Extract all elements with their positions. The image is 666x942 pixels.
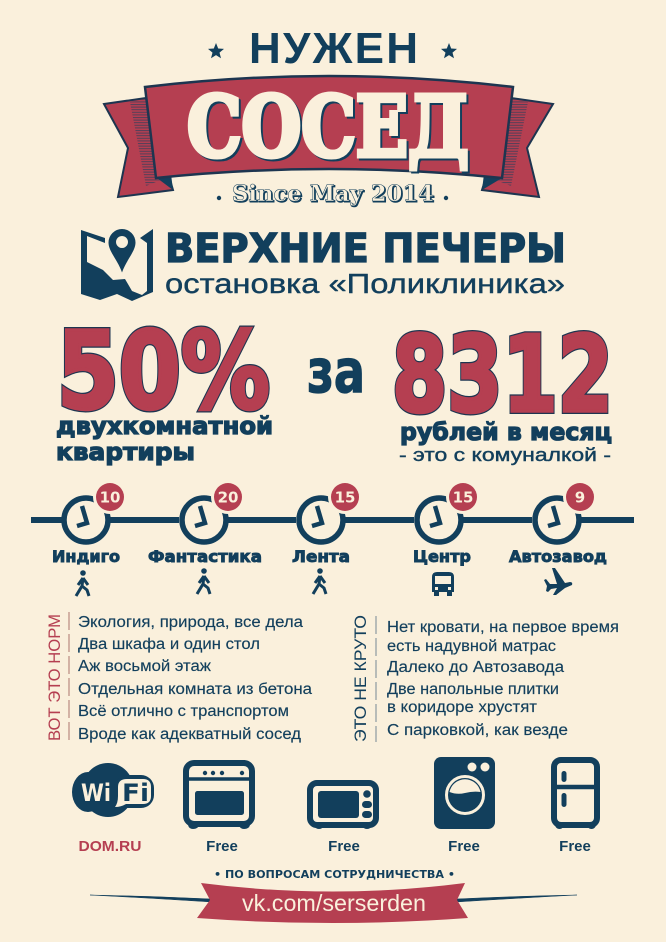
label: Free: Free bbox=[448, 838, 480, 855]
left flourish bbox=[90, 895, 212, 902]
subtitle: Since May 2014: Since May 2014 bbox=[232, 181, 434, 207]
right flourish bbox=[456, 895, 577, 902]
stop: Лента: 15 bbox=[335, 488, 355, 506]
icon: microwave bbox=[310, 783, 376, 829]
pros items: Два шкафа и один стол bbox=[78, 636, 260, 653]
icon: map with pin bbox=[81, 229, 153, 301]
label: рублей в месяц: рублей в месяц bbox=[400, 418, 612, 446]
pros items: Аж восьмой этаж bbox=[78, 658, 212, 675]
vertical label: ЭТО НЕ КРУТО: ЭТО НЕ КРУТО bbox=[351, 615, 370, 742]
heading: ВЕРХНИЕ ПЕЧЕРЫ: ВЕРХНИЕ ПЕЧЕРЫ bbox=[165, 226, 566, 272]
left ribbon tail bbox=[104, 98, 173, 197]
icon: washing machine bbox=[434, 757, 495, 829]
stop: Лента bbox=[292, 480, 362, 594]
stop: Лента: Лента bbox=[292, 547, 350, 566]
cons items: С парковкой, как везде bbox=[387, 722, 568, 739]
pros items: Отдельная комната из бетона bbox=[78, 681, 312, 698]
stop: Центр: Центр bbox=[413, 547, 471, 566]
cons items: есть надувной матрас bbox=[387, 638, 556, 655]
stop: Фантастика: Фантастика bbox=[148, 547, 262, 566]
label: двухкомнатной квартиры bbox=[56, 412, 273, 466]
vertical label: ВОТ ЭТО НОРМ: ВОТ ЭТО НОРМ bbox=[45, 614, 64, 741]
icon: wifi bbox=[72, 763, 154, 817]
ribbon shape bbox=[197, 883, 468, 923]
link: vk.com/serserden bbox=[242, 890, 426, 916]
stop: Автозавод: 9 bbox=[575, 488, 585, 506]
subtitle: Since May 2014: Since May 2014 bbox=[233, 182, 435, 208]
subheading: остановка: остановка «Поликлиника» bbox=[165, 268, 565, 299]
contact heading: • ПО ВОПРОСАМ СОТРУДНИЧЕСТВА • bbox=[214, 868, 455, 881]
panel: cons list bbox=[351, 615, 619, 742]
cons items: в коридоре хрустят bbox=[387, 699, 537, 716]
title: НУЖЕН: НУЖЕН bbox=[249, 24, 418, 73]
cons items: Две напольные плитки bbox=[387, 681, 559, 698]
separator bbox=[68, 612, 70, 742]
icon: wifi: Fi bbox=[122, 779, 149, 807]
icon: oven bbox=[186, 760, 252, 829]
stop: Фантастика: 20 bbox=[218, 488, 238, 506]
label: рублей в месяц bbox=[399, 418, 612, 465]
icon: right star bbox=[441, 43, 457, 58]
separator bbox=[375, 616, 377, 742]
label: Free: Free bbox=[559, 838, 591, 855]
ribbon main panel bbox=[145, 76, 513, 178]
cons items bbox=[387, 619, 619, 739]
cons items: Нет кровати, на первое время bbox=[387, 619, 619, 636]
stop: Индиго bbox=[52, 480, 127, 596]
pros items: Экология, природа, все дела bbox=[78, 614, 303, 631]
stop: Центр: 15 bbox=[453, 488, 473, 506]
big number: 50%: 50% bbox=[57, 310, 270, 434]
cons items: Далеко до Автозавода bbox=[387, 659, 564, 676]
contact ribbon bbox=[90, 883, 577, 923]
icon: left star bbox=[208, 43, 224, 58]
pros items: Вроде как адекватный сосед bbox=[78, 726, 301, 743]
label: Free: Free bbox=[206, 838, 238, 855]
stop: Фантастика bbox=[148, 480, 262, 594]
pros items bbox=[78, 614, 312, 743]
label: двухкомнатной квартиры: двухкомнатной bbox=[56, 412, 273, 440]
stop: Автозавод: Автозавод bbox=[509, 547, 607, 566]
word: за: за bbox=[307, 337, 365, 407]
stop: Центр bbox=[413, 480, 480, 596]
big number: 50%: 50% bbox=[57, 310, 270, 434]
icon: fridge bbox=[554, 760, 597, 829]
panel: pros list bbox=[45, 612, 312, 743]
timeline line bbox=[31, 517, 634, 523]
icon: wifi: Wi bbox=[81, 779, 111, 807]
label: Free: Free bbox=[328, 838, 360, 855]
banner word: СОСЕД bbox=[187, 78, 469, 176]
pros items: Всё отлично с транспортом bbox=[78, 703, 289, 720]
stop: Индиго: 10 bbox=[100, 488, 120, 506]
ribbon folds bbox=[157, 174, 502, 190]
timeline of travel times bbox=[31, 480, 634, 596]
stop: Автозавод bbox=[509, 480, 607, 595]
banner ribbon: СОСЕД bbox=[104, 76, 553, 197]
stop: Индиго: Индиго bbox=[52, 547, 120, 566]
label: рублей в месяц: - это с комуналкой - bbox=[399, 445, 611, 465]
banner word shadow: СОСЕД bbox=[189, 80, 471, 178]
label: двухкомнатной квартиры: квартиры bbox=[56, 438, 195, 466]
label: DOM.RU: DOM.RU bbox=[78, 838, 142, 855]
tail hatching bbox=[130, 99, 528, 186]
right ribbon tail bbox=[482, 98, 553, 197]
